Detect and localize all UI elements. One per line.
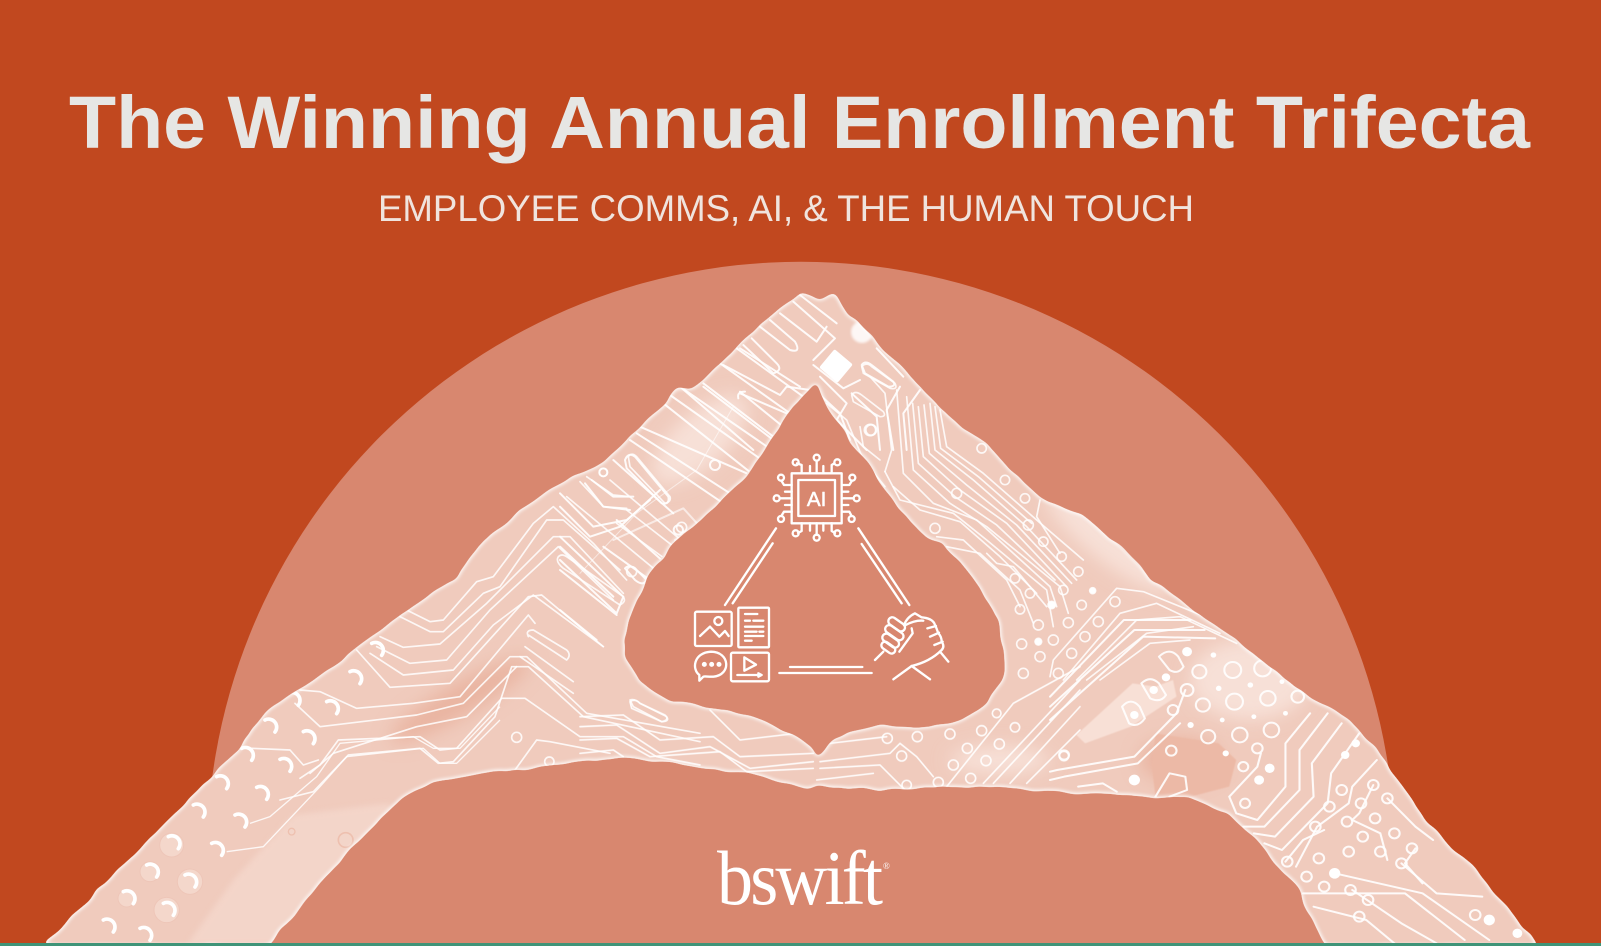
chip square and glow on fingertip	[819, 321, 873, 383]
connector: comms to human touch	[779, 667, 872, 673]
registered mark: ®	[883, 861, 890, 871]
icon: AI chip	[774, 455, 860, 541]
left forearm traces	[252, 454, 700, 800]
trifecta diagram	[695, 455, 948, 681]
lower palm traces	[580, 667, 1080, 790]
logo wordmark: bswift	[717, 836, 883, 922]
left hand fingers traces	[560, 348, 803, 640]
hands forming a triangle with circuit pattern	[42, 292, 1540, 946]
right hand traces and pads	[827, 364, 1237, 680]
bswift logo	[717, 836, 890, 922]
icon: employee comms media	[695, 608, 769, 681]
darker fields	[383, 646, 1220, 782]
left palm bumps	[103, 642, 500, 945]
soft highlights	[638, 381, 1310, 774]
connector: AI to comms	[725, 528, 776, 605]
right palm and forearm traces and pads	[1050, 620, 1522, 943]
connector: AI to human touch	[858, 528, 909, 605]
fingertip traces	[680, 295, 920, 450]
semicircle backdrop	[207, 262, 1395, 946]
icon: handshake / human touch	[875, 613, 948, 679]
bottom green stripe	[0, 943, 1601, 946]
title: The Winning Annual Enrollment Trifecta	[69, 81, 1531, 164]
icon: AI chip: AI	[807, 488, 826, 511]
circuit overlay clipped to hands	[103, 295, 1522, 945]
subtitle: EMPLOYEE COMMS, AI, & THE HUMAN TOUCH	[378, 188, 1194, 229]
hand silhouette	[42, 292, 1540, 946]
